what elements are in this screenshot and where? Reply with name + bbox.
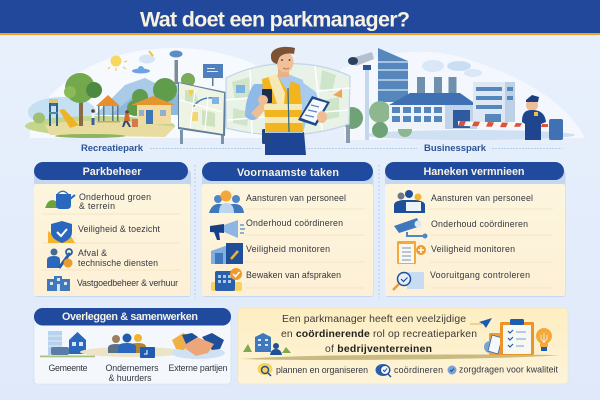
item: Veiligheid & toezicht: Veiligheid & toezicht — [78, 224, 161, 234]
icon: chimneys and clouds — [417, 60, 482, 94]
heading — [34, 162, 188, 180]
item: Externe partijen — [168, 333, 228, 373]
right arm — [302, 82, 322, 118]
left arm — [245, 84, 266, 120]
legend: plannen en organiseren — [258, 363, 368, 376]
panel: Parkbeheer: Parkbeheer — [83, 166, 142, 178]
item: Veiligheid monitoren — [211, 243, 330, 264]
icon: sun and clouds — [108, 51, 155, 74]
item: Onderhoud groen & terrein: & terrein — [79, 201, 115, 211]
illustration: park manager with map — [226, 47, 350, 155]
icon: sign — [203, 64, 223, 86]
icon: house — [131, 96, 175, 124]
item: Onderhoud groen & terrein — [45, 191, 151, 211]
item: Vooruitgang controleren: Vooruitgang controleren — [430, 270, 530, 280]
panel: Parkbeheer — [34, 162, 191, 297]
icon: gazebo — [96, 95, 120, 122]
icon: barrier post — [549, 119, 563, 140]
section label: Businesspark: Businesspark — [424, 143, 487, 154]
icon: park camera — [170, 50, 182, 84]
panel: summary — [238, 308, 568, 384]
phone and hand — [258, 89, 272, 105]
summary text: of bedrijventerreinen — [325, 344, 432, 355]
pants — [265, 132, 306, 155]
panel: Voornaamste taken — [202, 162, 374, 297]
item: Bewaken van afspraken — [211, 268, 341, 291]
item: Afval & technische diensten — [47, 248, 158, 268]
heading — [34, 308, 231, 326]
header banner — [0, 0, 600, 35]
item: Onderhoud coördineren: Onderhoud coördineren — [431, 219, 528, 229]
item: Externe partijen: Externe partijen — [168, 363, 228, 373]
icon: small map board — [178, 82, 226, 144]
illustration: recreation park — [25, 48, 262, 144]
item: Vastgoedbeheer & verhuur — [47, 276, 178, 291]
shirt — [265, 74, 308, 133]
summary text: Een parkmanager heeft een veelzijdige — [282, 314, 466, 325]
item: Ondernemers & huurders: & huurders — [108, 373, 152, 383]
item: Onderhoud coördineren: Onderhoud coördineren — [246, 218, 343, 228]
item: Gemeente — [40, 331, 95, 373]
big map — [226, 64, 350, 143]
legend: coördineren — [376, 364, 443, 377]
heading — [202, 162, 373, 181]
icon: light bulb — [536, 328, 552, 351]
item: Afval & technische diensten: Afval & — [78, 248, 107, 258]
item: Vooruitgang controleren — [393, 270, 530, 290]
icon: security camera — [348, 52, 374, 140]
icon: checklist clipboard — [500, 319, 534, 355]
item: Onderhoud coördineren — [394, 218, 528, 238]
item: Aansturen van personeel — [209, 190, 346, 213]
item: Ondernemers & huurders: Ondernemers — [106, 363, 159, 373]
icon: paper plane — [470, 318, 492, 328]
icon: barrier — [458, 121, 548, 127]
heading — [385, 162, 564, 180]
icon: guard — [522, 95, 546, 140]
legend: zorgdragen voor kwaliteit: zorgdragen voor kwaliteit — [459, 364, 559, 374]
panel: Haneken vermnieen: Haneken vermnieen — [424, 166, 524, 178]
item: Aansturen van personeel — [394, 190, 533, 213]
holster — [262, 129, 271, 144]
icon: tree — [64, 73, 102, 126]
illustration: business park — [340, 48, 585, 140]
item: Vastgoedbeheer & verhuur: Vastgoedbeheer & verhuur — [77, 278, 178, 288]
icon: green shrubs — [341, 101, 412, 138]
icon: trees behind house — [127, 73, 195, 116]
icon: building and person — [243, 333, 291, 355]
icon: playground — [49, 99, 79, 128]
section label: Recreatiepark: Recreatiepark — [81, 143, 144, 154]
item: Afval & technische diensten: technische diensten — [78, 258, 158, 268]
clipboard — [298, 96, 330, 126]
item: Gemeente: Gemeente — [48, 363, 88, 373]
panel: Overleggen & samenwerken: Overleggen & samenwerken — [62, 311, 198, 323]
icon: factory — [389, 93, 477, 129]
item: Veiligheid & toezicht — [48, 221, 161, 243]
title: Wat doet een parkmanager? — [140, 8, 410, 32]
icon: office tower — [378, 48, 408, 102]
item: Onderhoud coördineren — [210, 218, 343, 240]
item: Aansturen van personeel: Aansturen van personeel — [431, 193, 533, 203]
ground swoosh — [242, 354, 560, 360]
item: Ondernemers & huurders — [80, 334, 186, 383]
summary text — [281, 314, 477, 355]
panel: Haneken vermnieen — [385, 162, 566, 297]
panel: Voornaamste taken: Voornaamste taken — [237, 167, 339, 179]
icon: document and gear — [484, 333, 505, 355]
item: Veiligheid monitoren: Veiligheid monitoren — [246, 244, 330, 254]
legend: plannen en organiseren: plannen en organiseren — [276, 365, 368, 375]
legend: coördineren: coördineren — [394, 365, 443, 375]
item: Bewaken van afspraken: Bewaken van afspraken — [246, 270, 341, 280]
icon: people — [91, 109, 138, 127]
item: Aansturen van personeel: Aansturen van personeel — [246, 193, 346, 203]
item: Veiligheid monitoren: Veiligheid monitoren — [431, 244, 515, 254]
item: Veiligheid monitoren — [397, 241, 515, 264]
item: Onderhoud groen & terrein: Onderhoud groen — [79, 192, 151, 202]
head — [271, 47, 295, 77]
panel: Overleggen & samenwerken — [34, 308, 231, 384]
vest — [262, 75, 303, 132]
icon: office block — [473, 82, 515, 122]
summary text: en coördinerende rol op recreatieparken — [281, 329, 477, 340]
